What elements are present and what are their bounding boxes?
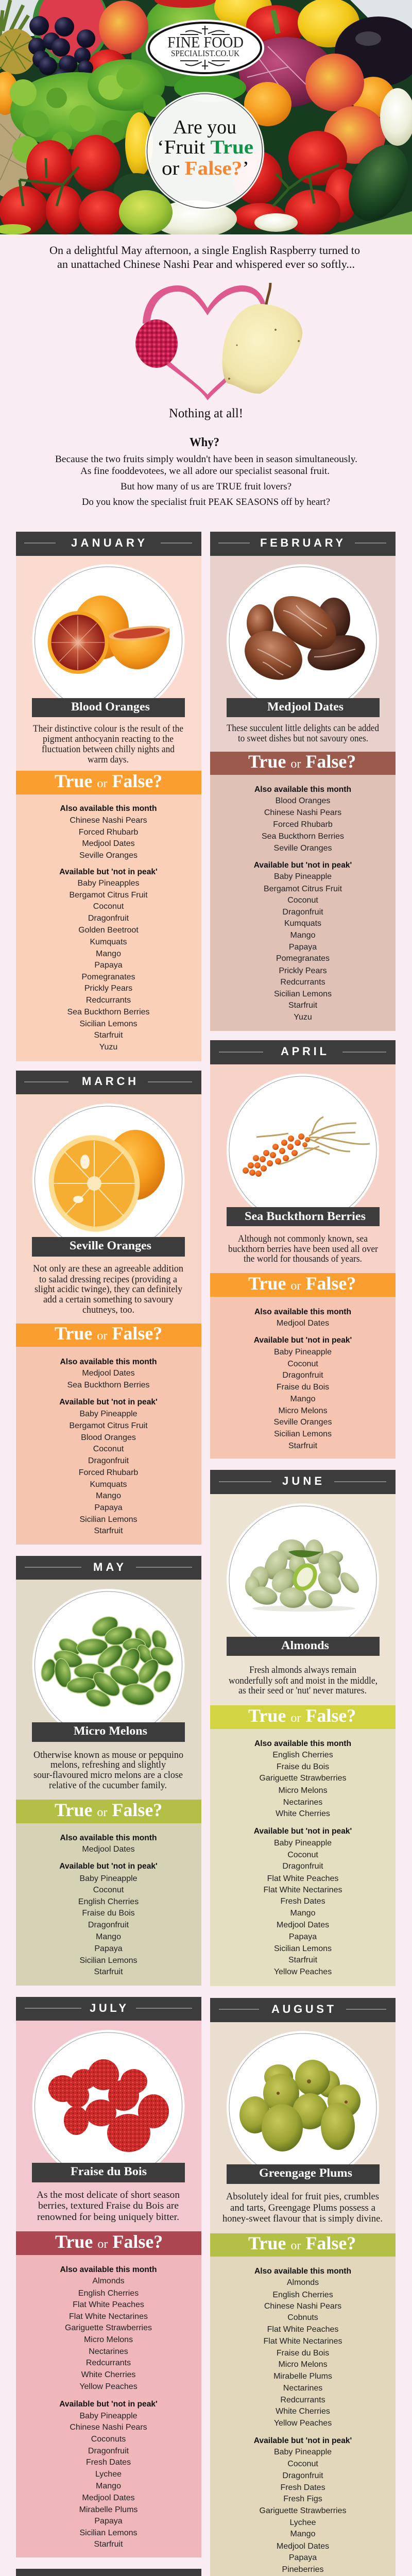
- availability lists: Also available this month: [254, 1308, 351, 1316]
- june header: JUNE: [282, 1475, 322, 1487]
- availability lists: Dragonfruit: [282, 908, 323, 917]
- availability lists: Medjool Dates: [277, 2542, 329, 2551]
- may header: [16, 1556, 201, 1580]
- hero logo: Fine Food Specialist: SPECIALIST.CO.UK: [171, 48, 240, 58]
- image: almonds: [227, 1503, 379, 1656]
- availability lists: Baby Pineapple: [274, 1348, 332, 1357]
- availability lists: Also available this month: [60, 804, 157, 813]
- why heading: Why?: [190, 436, 219, 449]
- availability lists: Micro Melons: [278, 1786, 328, 1795]
- availability lists: Sicilian Lemons: [274, 1944, 332, 1953]
- availability lists: Medjool Dates: [82, 1845, 135, 1854]
- true or false bar: [16, 1323, 201, 1347]
- availability lists: Starfruit: [94, 2540, 123, 2549]
- description: slight acidic twinge), they can definitely: [35, 1284, 182, 1295]
- may header: MAY: [93, 1561, 124, 1573]
- availability lists: Coconut: [93, 1445, 124, 1453]
- april header: APRIL: [281, 1045, 327, 1058]
- availability lists: Flat White Peaches: [73, 2300, 144, 2309]
- availability lists: Baby Pineapple: [274, 872, 332, 881]
- availability lists: Sicilian Lemons: [79, 1515, 138, 1524]
- availability lists: Pineberries: [282, 2565, 323, 2574]
- availability lists: Blood Oranges: [276, 796, 330, 805]
- why explanation text: Do you know the specialist fruit PEAK SEASONS off by heart?: [82, 497, 330, 507]
- march header: [16, 1071, 201, 1094]
- availability lists: [59, 1834, 158, 1976]
- name bar: fraise du bois: Fraise du Bois: [71, 2165, 147, 2178]
- availability lists: Available but 'not in peak': [59, 1398, 158, 1406]
- description: [228, 1233, 379, 1264]
- availability lists: Available but 'not in peak': [254, 2436, 352, 2445]
- availability lists: Chinese Nashi Pears: [70, 816, 147, 825]
- availability lists: Seville Oranges: [79, 851, 138, 860]
- why explanation text: But how many of us are TRUE fruit lovers?: [121, 481, 291, 492]
- availability lists: Gariguette Strawberries: [260, 1774, 346, 1783]
- availability lists: Dragonfruit: [282, 1862, 323, 1871]
- availability lists: Starfruit: [288, 1956, 318, 1964]
- availability lists: Pomegranates: [276, 954, 330, 963]
- description: add a certain something to savoury: [43, 1294, 174, 1305]
- description: Fresh almonds always remain: [249, 1665, 356, 1675]
- availability lists: [254, 1308, 352, 1450]
- hero title circle: [145, 92, 264, 210]
- panel: april: [210, 1040, 396, 1459]
- availability lists: [254, 785, 352, 1022]
- availability lists: Micro Melons: [278, 1406, 328, 1415]
- availability lists: Available but 'not in peak': [254, 1336, 352, 1345]
- availability lists: White Cherries: [81, 2370, 135, 2379]
- true or false bar: True or False?: [248, 1273, 356, 1294]
- march header: MARCH: [82, 1075, 136, 1088]
- name bar: medjool dates: Medjool Dates: [267, 700, 344, 713]
- availability lists: Nectarines: [283, 1798, 322, 1807]
- availability lists: Also available this month: [254, 785, 351, 794]
- availability lists: Lychee: [95, 2470, 122, 2479]
- name bar: sea buckthorn berries: [227, 1207, 380, 1226]
- description: melons, refreshing and slightly: [50, 1759, 166, 1770]
- availability lists: Fresh Dates: [280, 2483, 325, 2492]
- description: Their distinctive colour is the result of the: [33, 723, 183, 734]
- availability lists: Kumquats: [284, 919, 321, 928]
- availability lists: White Cherries: [276, 2407, 330, 2416]
- availability lists: Mango: [96, 950, 121, 958]
- availability lists: Papaya: [289, 2553, 317, 2562]
- panel: february: [210, 532, 396, 1031]
- availability lists: White Cherries: [276, 1809, 330, 1818]
- availability lists: Mango: [290, 1395, 316, 1403]
- availability lists: Gariguette Strawberries: [65, 2324, 152, 2332]
- availability lists: Available but 'not in peak': [254, 1827, 352, 1836]
- availability lists: Starfruit: [94, 1968, 123, 1976]
- availability lists: Coconuts: [91, 2435, 126, 2444]
- availability lists: Chinese Nashi Pears: [70, 2423, 147, 2432]
- description: to salad dressing recipes (providing a: [39, 1274, 178, 1285]
- description: [33, 1263, 183, 1315]
- february header: [210, 532, 396, 556]
- availability lists: Nectarines: [89, 2347, 128, 2356]
- availability lists: Available but 'not in peak': [59, 1862, 158, 1871]
- availability lists: Also available this month: [60, 1358, 157, 1366]
- availability lists: Available but 'not in peak': [59, 2400, 158, 2409]
- availability lists: Sicilian Lemons: [274, 1430, 332, 1438]
- name bar: blood oranges: [32, 698, 185, 717]
- availability lists: English Cherries: [272, 1751, 333, 1759]
- description: honey-sweet flavour that is simply divine.: [222, 2213, 383, 2224]
- description: the world for thousands of years.: [244, 1253, 362, 1264]
- availability lists: Starfruit: [94, 1031, 123, 1040]
- availability lists: Mango: [290, 931, 316, 940]
- availability lists: Fresh Dates: [86, 2458, 131, 2467]
- availability lists: Mango: [96, 1933, 121, 1941]
- availability lists: Sicilian Lemons: [79, 2529, 138, 2537]
- availability lists: Prickly Pears: [84, 984, 132, 993]
- true or false bar: [210, 751, 396, 775]
- july header: [16, 1997, 201, 2021]
- availability lists: Gariguette Strawberries: [260, 2506, 346, 2515]
- availability lists: Yellow Peaches: [274, 2419, 332, 2428]
- description: as their seed or 'nut' never matures.: [238, 1685, 367, 1696]
- description: and tarts, Greengage Plums possess a: [230, 2202, 376, 2213]
- availability lists: Bergamot Citrus Fruit: [264, 885, 342, 893]
- description: These succulent little delights can be added: [227, 723, 379, 734]
- name bar: fraise du bois: [32, 2163, 185, 2182]
- description: sour-flavoured micro melons are a close: [33, 1770, 183, 1781]
- availability lists: Flat White Nectarines: [264, 1886, 342, 1894]
- availability lists: Micro Melons: [278, 2360, 328, 2369]
- availability lists: Dragonfruit: [282, 2471, 323, 2480]
- availability lists: Sicilian Lemons: [274, 990, 332, 998]
- august header: [210, 1998, 396, 2022]
- image: medjool dates: [227, 564, 379, 717]
- description: fluctuation between chilly nights and: [42, 744, 175, 755]
- image: fraise du bois: [32, 2030, 184, 2182]
- availability lists: Forced Rhubarb: [79, 828, 138, 837]
- january header: [16, 532, 201, 556]
- name bar: greengage plums: Greengage Plums: [259, 2166, 352, 2179]
- availability lists: Coconut: [93, 902, 124, 911]
- availability lists: Sea Buckthorn Berries: [67, 1008, 150, 1016]
- availability lists: Coconut: [287, 2460, 318, 2468]
- name bar: almonds: Almonds: [281, 1639, 329, 1652]
- availability lists: Fresh Dates: [280, 1897, 325, 1906]
- availability lists: Baby Pineapple: [79, 1874, 138, 1883]
- name bar: seville oranges: Seville Oranges: [70, 1239, 151, 1252]
- availability lists: Redcurrants: [86, 996, 131, 1005]
- availability lists: English Cherries: [78, 2289, 139, 2298]
- true or false bar: True or False?: [55, 771, 162, 791]
- availability lists: Starfruit: [288, 1001, 318, 1010]
- availability lists: Also available this month: [60, 2265, 157, 2274]
- image: seville oranges: [32, 1104, 184, 1256]
- availability lists: Dragonfruit: [88, 1921, 129, 1929]
- true or false bar: [16, 1800, 201, 1823]
- availability lists: English Cherries: [78, 1897, 139, 1906]
- availability lists: Kumquats: [90, 938, 127, 946]
- intro text: On a delightful May afternoon, a single English Raspberry turned to: [49, 244, 360, 257]
- availability lists: Papaya: [289, 1933, 317, 1941]
- availability lists: [254, 1739, 352, 1976]
- image: micro melons: [32, 1589, 184, 1741]
- availability lists: Micro Melons: [84, 2335, 133, 2344]
- availability lists: [59, 804, 158, 1052]
- availability lists: Dragonfruit: [282, 1371, 323, 1380]
- hero title circle: Are you: [173, 116, 236, 138]
- hero photo of fresh fruit and vegetables: [0, 0, 412, 238]
- availability lists: Yuzu: [294, 1013, 312, 1022]
- availability lists: Baby Pineapple: [274, 1839, 332, 1848]
- name bar: medjool dates: [227, 698, 380, 717]
- availability lists: Bergamot Citrus Fruit: [69, 891, 148, 900]
- availability lists: Mango: [96, 1492, 121, 1500]
- description: wonderfully soft and moist in the middle,: [229, 1675, 377, 1686]
- availability lists: Flat White Nectarines: [69, 2312, 148, 2321]
- hero logo: Fine Food Specialist: [146, 20, 264, 76]
- availability lists: Medjool Dates: [82, 2494, 135, 2502]
- availability lists: Seville Oranges: [274, 1418, 332, 1427]
- availability lists: Papaya: [94, 961, 123, 970]
- availability lists: Medjool Dates: [82, 1369, 135, 1378]
- availability lists: Coconut: [287, 896, 318, 905]
- availability lists: Redcurrants: [86, 2359, 131, 2367]
- availability lists: Yellow Peaches: [79, 2382, 138, 2391]
- january header: JANUARY: [71, 536, 145, 549]
- availability lists: Available but 'not in peak': [254, 861, 352, 870]
- availability lists: Flat White Peaches: [267, 2325, 338, 2334]
- availability lists: Dragonfruit: [88, 914, 129, 923]
- description: warm days.: [88, 754, 129, 765]
- availability lists: Flat White Nectarines: [264, 2337, 342, 2346]
- description: chutneys, too.: [82, 1304, 134, 1315]
- availability lists: Available but 'not in peak': [59, 868, 158, 876]
- true or false bar: [16, 2231, 201, 2255]
- availability lists: Chinese Nashi Pears: [264, 808, 341, 817]
- availability lists: Forced Rhubarb: [273, 820, 333, 829]
- availability lists: English Cherries: [272, 2291, 333, 2299]
- availability lists: Baby Pineapples: [77, 879, 140, 888]
- availability lists: Sicilian Lemons: [79, 1956, 138, 1965]
- name bar: greengage plums: [227, 2164, 380, 2184]
- availability lists: Redcurrants: [280, 2396, 325, 2404]
- description: buckthorn berries have been used all over: [228, 1244, 379, 1255]
- availability lists: Fresh Figs: [283, 2495, 322, 2503]
- availability lists: Yuzu: [99, 1043, 117, 1052]
- july header: JULY: [90, 2002, 126, 2014]
- true or false bar: [210, 1273, 396, 1297]
- description: Although not commonly known, sea: [238, 1233, 368, 1244]
- description: Otherwise known as mouse or pepquino: [33, 1750, 183, 1760]
- availability lists: Yellow Peaches: [274, 1968, 332, 1976]
- availability lists: Bergamot Citrus Fruit: [69, 1421, 148, 1430]
- availability lists: Sicilian Lemons: [79, 1020, 138, 1028]
- availability lists: Mango: [290, 1909, 316, 1918]
- availability lists: Kumquats: [90, 1480, 127, 1489]
- availability lists: Fraise du Bois: [277, 1762, 329, 1771]
- true or false bar: True or False?: [55, 2231, 163, 2252]
- description: [37, 2190, 180, 2223]
- availability lists: Chinese Nashi Pears: [264, 2302, 341, 2311]
- february header: FEBRUARY: [260, 536, 343, 549]
- name bar: micro melons: [32, 1722, 185, 1742]
- availability lists: Prickly Pears: [279, 967, 327, 975]
- availability lists: Coconut: [93, 1886, 124, 1894]
- june header: [210, 1470, 396, 1494]
- intro text: an unattached Chinese Nashi Pear and whispered ever so softly...: [57, 258, 355, 270]
- panel: june: [210, 1470, 396, 1986]
- availability lists: Seville Oranges: [274, 844, 332, 853]
- availability lists: Baby Pineapple: [79, 2412, 138, 2420]
- description: Absolutely ideal for fruit pies, crumbles: [226, 2191, 379, 2202]
- availability lists: Nectarines: [283, 2384, 322, 2393]
- description: [33, 1750, 183, 1791]
- panel: july: [16, 1997, 201, 2557]
- panel: september: [16, 2569, 201, 2576]
- availability lists: Also available this month: [254, 2267, 351, 2276]
- true or false bar: True or False?: [248, 751, 356, 772]
- availability lists: Almonds: [92, 2277, 125, 2285]
- availability lists: Redcurrants: [280, 978, 325, 987]
- availability lists: Dragonfruit: [88, 1456, 129, 1465]
- availability lists: Also available this month: [254, 1739, 351, 1748]
- nothing at all caption: Nothing at all!: [169, 406, 243, 420]
- availability lists: Papaya: [94, 1944, 123, 1953]
- image: sea buckthorn berries: [227, 1074, 379, 1226]
- panel: march: [16, 1071, 201, 1545]
- availability lists: Lychee: [289, 2518, 316, 2527]
- panel: january: [16, 532, 201, 1061]
- availability lists: Fraise du Bois: [277, 2349, 329, 2358]
- hero title circle: ‘Fruit True: [157, 137, 253, 158]
- why explanation text: As fine fooddevotees, we all adore our specialist seasonal fruit.: [80, 466, 330, 477]
- name bar: seville oranges: [32, 1237, 185, 1257]
- description: [33, 723, 183, 765]
- image: blood oranges: [32, 564, 184, 717]
- september header: [16, 2569, 201, 2576]
- availability lists: Sea Buckthorn Berries: [67, 1381, 150, 1389]
- availability lists: Mirabelle Plums: [273, 2372, 332, 2381]
- hero logo: Fine Food Specialist: FINE FOOD: [167, 33, 244, 51]
- intro text: [49, 244, 360, 270]
- true or false bar: True or False?: [248, 1705, 356, 1726]
- availability lists: Papaya: [289, 943, 317, 952]
- description: renowned for being uniquely bitter.: [37, 2212, 179, 2223]
- panel: august: [210, 1998, 396, 2576]
- description: [227, 723, 379, 744]
- image: greengage plums: [227, 2031, 379, 2183]
- why explanation text: [55, 454, 357, 507]
- august header: AUGUST: [271, 2003, 334, 2015]
- description: [229, 1665, 377, 1696]
- availability lists: Mango: [96, 2482, 121, 2490]
- availability lists: Medjool Dates: [82, 839, 135, 848]
- availability lists: Starfruit: [94, 1527, 123, 1535]
- name bar: blood oranges: Blood Oranges: [71, 700, 150, 713]
- availability lists: Forced Rhubarb: [79, 1468, 138, 1477]
- availability lists: Coconut: [287, 1360, 318, 1368]
- name bar: almonds: [227, 1637, 380, 1656]
- availability lists: Almonds: [287, 2278, 319, 2287]
- panel: may: [16, 1556, 201, 1986]
- availability lists: Cobnuts: [287, 2313, 318, 2322]
- availability lists: Flat White Peaches: [267, 1874, 338, 1883]
- description: [222, 2191, 383, 2224]
- availability lists: [59, 1358, 158, 1535]
- hero title circle: or False?’: [162, 158, 249, 179]
- availability lists: Medjool Dates: [277, 1319, 329, 1328]
- true or false bar: [16, 771, 201, 794]
- availability lists: Pomegranates: [81, 973, 135, 981]
- description: As the most delicate of short season: [37, 2190, 180, 2200]
- name bar: micro melons: Micro Melons: [74, 1724, 147, 1737]
- availability lists: Coconut: [287, 1851, 318, 1859]
- availability lists: Fraise du Bois: [82, 1909, 135, 1918]
- availability lists: Sea Buckthorn Berries: [262, 832, 344, 841]
- true or false bar: True or False?: [55, 1323, 162, 1344]
- description: relative of the cucumber family.: [49, 1780, 167, 1791]
- description: to sweet dishes but not savoury ones.: [238, 733, 368, 744]
- availability lists: Papaya: [94, 2517, 123, 2526]
- availability lists: Also available this month: [60, 1834, 157, 1842]
- availability lists: [59, 2265, 158, 2549]
- availability lists: Baby Pineapple: [274, 2448, 332, 2456]
- availability lists: [254, 2267, 352, 2576]
- availability lists: Mirabelle Plums: [79, 2505, 138, 2514]
- description: Not only are these an agreeable addition: [33, 1263, 183, 1274]
- availability lists: Dragonfruit: [88, 2447, 129, 2455]
- description: berries, textured Fraise du Bois are: [38, 2200, 179, 2211]
- availability lists: Blood Oranges: [81, 1433, 136, 1442]
- true or false bar: True or False?: [248, 2233, 356, 2253]
- true or false bar: [210, 1705, 396, 1729]
- availability lists: Starfruit: [288, 1442, 318, 1450]
- availability lists: Papaya: [94, 1503, 123, 1512]
- availability lists: Fraise du Bois: [277, 1383, 329, 1392]
- availability lists: Mango: [290, 2530, 316, 2538]
- availability lists: Medjool Dates: [277, 1921, 329, 1929]
- availability lists: Golden Beetroot: [78, 926, 139, 935]
- name bar: sea buckthorn berries: Sea Buckthorn Berries: [245, 1210, 366, 1223]
- availability lists: Baby Pineapple: [79, 1410, 138, 1418]
- true or false bar: True or False?: [55, 1800, 162, 1820]
- april header: [210, 1040, 396, 1064]
- why explanation text: Because the two fruits simply wouldn't have been in season simultaneously.: [55, 454, 357, 465]
- true or false bar: [210, 2233, 396, 2257]
- description: pigment anthocyanin reacting to the: [43, 734, 174, 744]
- heart with raspberry and nashi pear: [135, 283, 302, 400]
